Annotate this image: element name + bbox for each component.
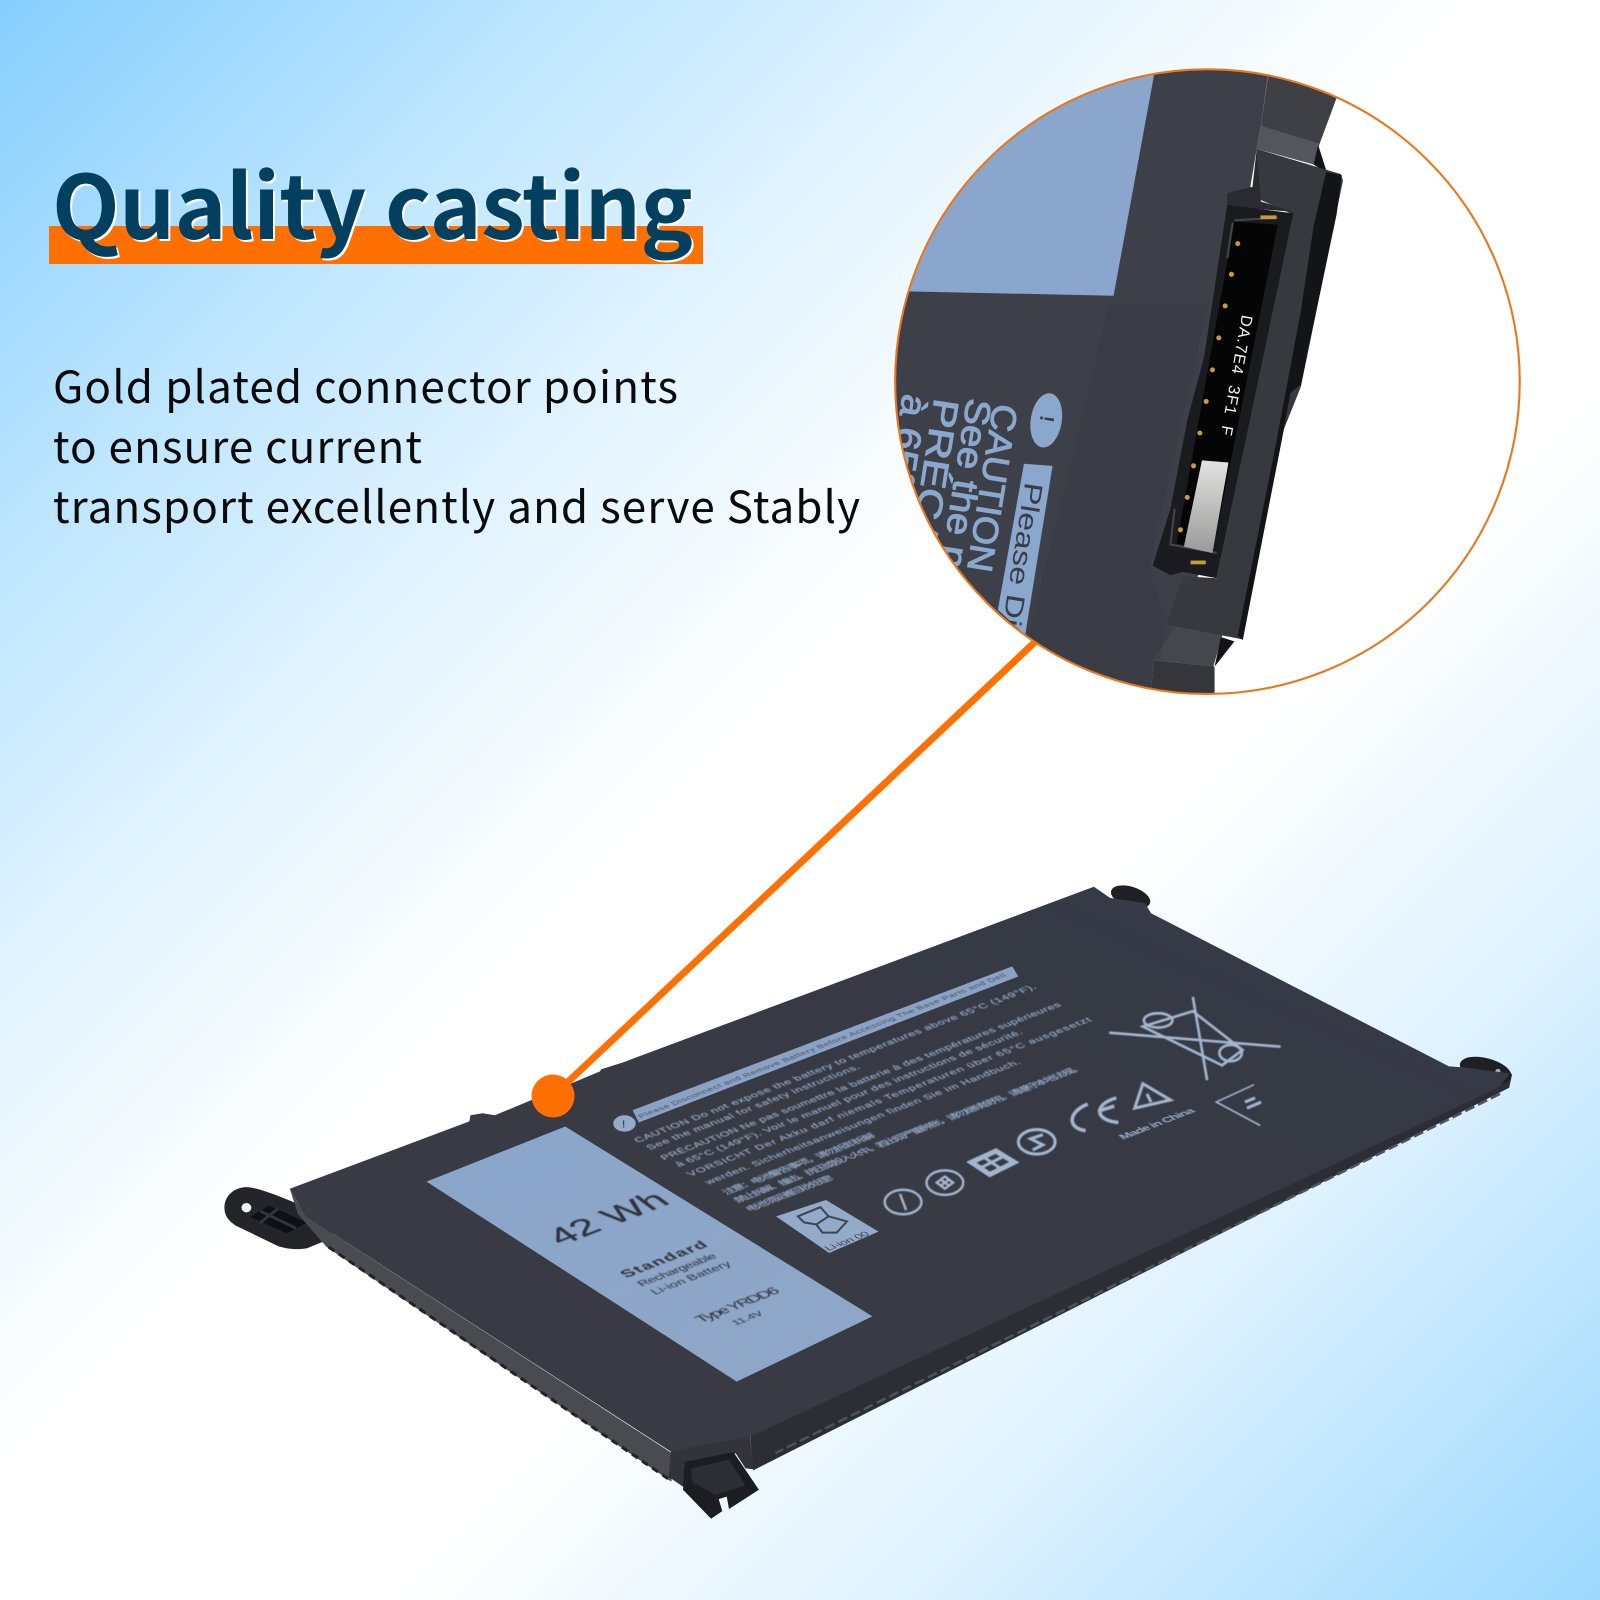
icon: CE mark (1072, 1098, 1118, 1131)
capacity label text (538, 1186, 784, 1327)
capacity label text: Standard (616, 1239, 712, 1280)
safety text block: 注意：电池警告事项，请勿拆卸拆解 (718, 1131, 880, 1197)
safety text block: PRÉCAUTION Ne pas soumettre la batterie à des températures supérieures (657, 1001, 1064, 1162)
capacity label panel (427, 1127, 872, 1382)
subtle crease shading (1151, 660, 1159, 688)
gold connector pins (1178, 215, 1276, 564)
top edge strip (1261, 76, 1336, 146)
battery body in source coordinates (290, 881, 1514, 1482)
close-up header text: Please Di (997, 480, 1049, 629)
close-up caution text: PRÉCAUTION (882, 396, 965, 686)
lower shell (1151, 660, 1215, 693)
close-up blue label (910, 75, 1154, 296)
lower dark wedge (1215, 637, 1234, 667)
warning header text: Please Disconnect and Remove Battery Before Accessing The Base Parts and Dell (635, 972, 1008, 1119)
capacity label text: Li-ion Battery (647, 1259, 735, 1296)
close-up header bar (998, 464, 1053, 635)
orange connector line (553, 641, 1036, 1096)
right mounting ear (1457, 1052, 1514, 1089)
circuit board marking: DA.7E4 3F1 F (1217, 314, 1255, 437)
certification icons (885, 997, 1281, 1214)
connector circuit board (1177, 222, 1278, 553)
safety text block: à 65°C (149°F). Voir le manuel pour des instructions de sécurité. (674, 1029, 1026, 1168)
safety text block: 电池须妥善回收处理！ (742, 1171, 844, 1214)
connector housing (1166, 149, 1343, 639)
orange anchor dot (532, 1074, 574, 1118)
left mounting tab (224, 1187, 333, 1249)
white contact pad (1184, 460, 1228, 553)
safety text block: 禁止拆解、撞击、挤压或投入火中。若出现严重肿胀，请勿继续使用。请遵守本地法规。 (730, 1063, 1088, 1205)
warning icon: ! (622, 1120, 625, 1131)
close-up caution text: à 65°C (876, 392, 934, 519)
icon: no symbol (885, 1190, 921, 1214)
clip tab (683, 1452, 759, 1519)
icon: crossed-out bin (1109, 997, 1281, 1080)
safety text block: VORSICHT Der Akku darf niemals Temperaturen über 65°C ausgesetzt (685, 1016, 1094, 1178)
close-up warning icon: ! (1035, 414, 1058, 424)
battery product drawing (224, 881, 1514, 1519)
battery shell close-up (896, 70, 1268, 688)
warning icon (613, 1115, 636, 1132)
connector notch frame (1227, 149, 1295, 212)
close-up caution text: See the p (933, 396, 998, 571)
warning header bar (633, 966, 1018, 1122)
housing dark edge (1238, 172, 1342, 640)
safety text block: werden. Sicherheitsanweisungen finden Sie im Handbuch. (702, 1059, 1024, 1187)
safety text block (632, 984, 1094, 1214)
white circle background (895, 69, 1520, 694)
clipped close-up (876, 50, 1343, 710)
safety text block: See the manual for safety instructions. (644, 1064, 863, 1152)
icon: warning triangle (1135, 1084, 1170, 1108)
recycling label (776, 1200, 879, 1253)
description text block (53, 352, 860, 536)
description text block: transport excellently and serve Stably (53, 472, 860, 536)
icon: recycling square (971, 1151, 1014, 1174)
title with orange highlight bar (49, 138, 703, 265)
left side wall (290, 1189, 673, 1482)
lower connector block (1154, 626, 1222, 666)
left side wall ribs (329, 1247, 669, 1480)
close-up caution text (899, 394, 1016, 572)
capacity label text: Type YRDD6 (692, 1285, 784, 1325)
made in China text: Made in China (1117, 1107, 1199, 1141)
orange circle outline (895, 69, 1520, 694)
capacity label text: 11.4V (729, 1309, 767, 1327)
close-up caution text: CAUTION (959, 401, 1024, 575)
magnified connector callout (876, 50, 1520, 710)
right side wall ribs (776, 1094, 1500, 1453)
icon: circled S (1018, 1130, 1055, 1154)
clip base (669, 1436, 754, 1488)
connector tab (1257, 126, 1319, 164)
capacity label text: 42 Wh (538, 1186, 677, 1250)
close-up warning icon (1030, 393, 1062, 448)
description text block: Gold plated connector points (53, 352, 678, 416)
right side wall (750, 1073, 1512, 1470)
date box lines (1216, 1085, 1261, 1126)
safety text block: CAUTION Do not expose the battery to temperatures above 65°C (149°F). (632, 984, 1039, 1144)
top right mounting ear (1108, 881, 1153, 913)
connector opening (1153, 205, 1293, 578)
connector frame highlight (1170, 218, 1278, 553)
bottom mounting clip (669, 1436, 759, 1519)
description text block: to ensure current (53, 412, 422, 476)
recycling label: Li-ion 00 (822, 1230, 872, 1253)
top face (290, 887, 1510, 1452)
capacity label text: Rechargeable (634, 1251, 720, 1288)
title text: Quality casting (52, 138, 693, 265)
orange title bar (49, 226, 703, 264)
dark notch behind tab (1314, 145, 1326, 170)
icon: circled mark (927, 1170, 963, 1195)
